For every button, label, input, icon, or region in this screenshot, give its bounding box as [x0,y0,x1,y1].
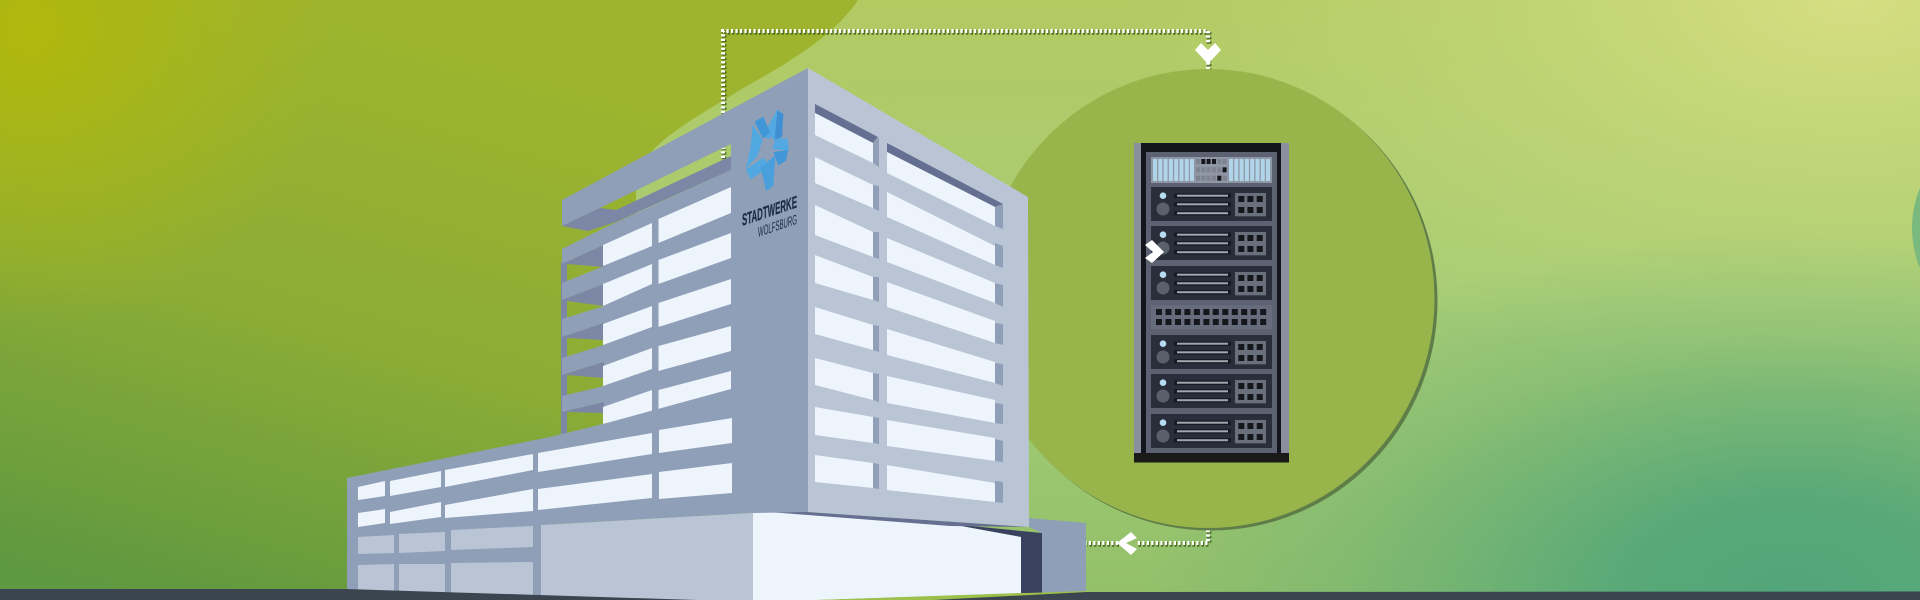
roof soffit shadows [562,156,731,413]
arrow: right into server rack [1145,240,1164,263]
tower left windows [603,187,731,424]
right edge circle [1912,124,1920,332]
lower block left face [347,370,808,600]
right face pillars [873,137,1003,503]
ground: green sliver [817,591,1087,600]
tower left stair column strip [561,262,567,438]
ground floor white front [753,511,1021,600]
server unit 6 [1151,414,1272,448]
logo text: STADTWERKE WOLFSBURG [742,192,797,241]
dotted connection line: building to server [723,31,1209,159]
server unit 1 [1151,187,1272,221]
tower right face [808,68,1029,527]
building [347,68,1086,600]
soffit shadow [769,512,1029,527]
side block behind tower [1029,518,1086,593]
lower block entrance panel [541,513,753,600]
rack top panel [1151,157,1272,183]
ground floor windows [358,526,533,600]
server unit 4 [1151,335,1272,369]
ground: right dark strip [933,592,1920,600]
server unit 5 [1151,374,1272,408]
right face window head shadows [815,104,1003,207]
server unit 3 [1151,266,1272,300]
background: light green blob [636,0,1920,600]
ground floor recess [950,524,1042,593]
arrow: down into server circle [1195,43,1221,64]
server rack [1134,143,1289,462]
server unit 2 [1151,226,1272,260]
right face windows [815,113,995,502]
tower left face [562,68,808,512]
ground: left dark strip [0,589,697,600]
building: WOLFSBURG [758,212,797,241]
logo: Stadtwerke star [746,109,789,191]
circle behind server rack [982,69,1438,530]
arrow: left toward building [1117,532,1137,555]
building: STADTWERKE [742,192,797,230]
rack switch panel [1151,305,1272,329]
dotted connection line: server to building [1086,530,1209,544]
lower block windows [358,418,732,527]
